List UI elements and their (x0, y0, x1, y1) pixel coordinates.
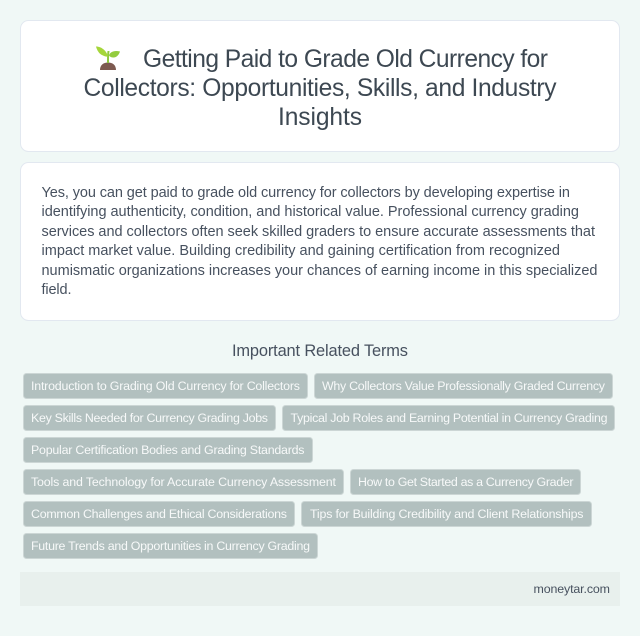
heading: related terms: Important Related Terms (232, 342, 408, 360)
tag: tools: Tools and Technology for Accurate Currency Assessment (31, 475, 337, 489)
tag: job roles: Typical Job Roles and Earning Potential in Currency Grading (290, 411, 608, 425)
tag: future trends (24, 534, 318, 558)
tag: get started (350, 470, 580, 494)
title: Collectors: Opportunities, Skills, and Industry (84, 75, 557, 102)
tag: credibility: Tips for Building Credibility and Client Relationships (310, 507, 584, 521)
tag: future trends: Future Trends and Opportunities in Currency Grading (31, 539, 310, 553)
tag: key skills (24, 406, 276, 430)
tag: certification (24, 438, 312, 462)
panel: summary text: Yes, you can get paid to grade old currency for collectors by developing expertise in (42, 185, 570, 201)
tag: why collectors (314, 374, 612, 398)
tag list: related terms (24, 374, 614, 558)
tag: introduction (24, 374, 308, 398)
tag: why collectors: Why Collectors Value Professionally Graded Currency (322, 379, 606, 393)
tag: certification: Popular Certification Bodies and Grading Standards (31, 443, 304, 457)
tag: challenges (24, 502, 294, 526)
title: Getting Paid to Grade Old Currency for (143, 46, 548, 73)
tag: challenges: Common Challenges and Ethical Considerations (31, 507, 287, 521)
tag: introduction: Introduction to Grading Old Currency for Collectors (31, 379, 300, 393)
tag: job roles (282, 406, 614, 430)
panel: summary text: identifying authenticity, condition, and historical value. Professional currency grading (42, 204, 579, 220)
tag: get started: How to Get Started as a Currency Grader (358, 475, 574, 489)
panel: summary text: numismatic organizations increases your chances of earning income in this specialized (42, 263, 598, 279)
icon: seedling (96, 46, 120, 70)
tag: key skills: Key Skills Needed for Currency Grading Jobs (31, 411, 268, 425)
panel: summary text (20, 162, 620, 320)
panel: summary text: services and collectors often seek skilled graders to ensure accurate assessments that (42, 224, 595, 240)
panel: title card (20, 20, 620, 152)
tag: tools (24, 470, 344, 494)
title: Insights (278, 104, 362, 131)
panel: summary text: impact market value. Building credibility and gaining certification from recognized (42, 243, 560, 259)
footer: moneytar.com (534, 582, 610, 596)
tag: credibility (302, 502, 592, 526)
panel: summary text: field. (42, 282, 72, 298)
title (84, 46, 557, 131)
footer (20, 572, 620, 606)
